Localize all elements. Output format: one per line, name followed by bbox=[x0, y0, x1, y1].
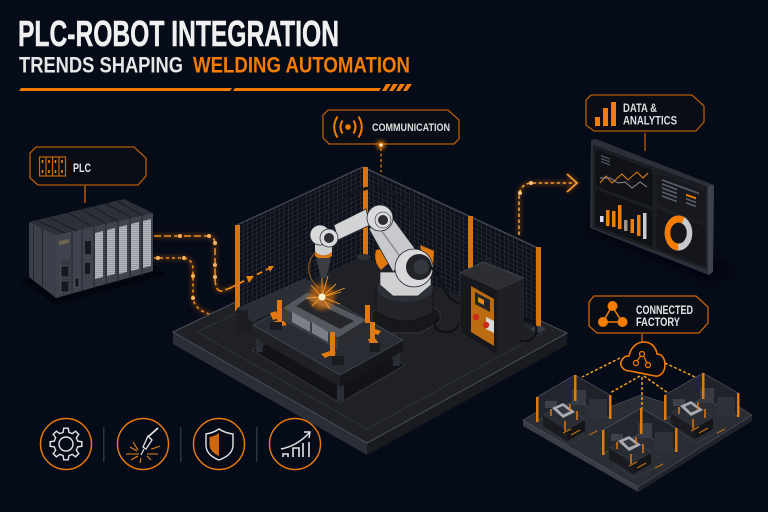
welding spark bbox=[306, 276, 345, 310]
connector: communication down to cell bbox=[377, 141, 385, 172]
Data and Analytics callout bbox=[586, 95, 704, 151]
robot upper arm bbox=[334, 205, 393, 240]
line chart bbox=[600, 172, 648, 188]
icon: growth chart bbox=[270, 418, 320, 470]
robot base bbox=[375, 245, 434, 296]
robot wrist and torch bbox=[309, 225, 338, 287]
icon: network triangle bbox=[598, 301, 628, 327]
connector: PLC to robot cell bbox=[154, 234, 233, 322]
Communication callout bbox=[323, 110, 459, 144]
icon: welding torch bbox=[118, 418, 168, 470]
main title: PLC-ROBOT INTEGRATION bbox=[18, 13, 339, 54]
orange clamps bbox=[270, 300, 381, 365]
control panel bbox=[471, 286, 494, 346]
icon: PLC modules bbox=[40, 157, 66, 176]
bottom icon row bbox=[40, 418, 320, 470]
floor platform bbox=[173, 240, 567, 455]
title block bbox=[18, 13, 412, 91]
icon: cloud network bbox=[621, 342, 665, 376]
Communication text: COMMUNICATION bbox=[372, 122, 450, 134]
welding cable bbox=[323, 188, 413, 235]
donut panel bbox=[656, 208, 706, 267]
workpiece frame bbox=[282, 292, 367, 350]
factory platform bbox=[523, 385, 752, 492]
donut chart bbox=[667, 218, 690, 248]
mini cell: center bbox=[602, 408, 678, 478]
cables to controller bbox=[430, 267, 536, 341]
Data text: DATA & bbox=[623, 103, 657, 115]
robot shoulder joint bbox=[395, 249, 433, 287]
Factory text: FACTORY bbox=[636, 315, 680, 329]
bar chart panel bbox=[595, 188, 653, 248]
cloud network links bbox=[582, 358, 695, 408]
PLC callout bbox=[30, 147, 146, 203]
icon: shield bbox=[194, 418, 244, 470]
welding fixture table bbox=[252, 292, 405, 403]
subtitle orange: WELDING AUTOMATION bbox=[193, 52, 410, 78]
safety fence bbox=[235, 167, 545, 332]
robot lower arm bbox=[369, 212, 416, 272]
PLC label text: PLC bbox=[73, 161, 91, 175]
Analytics text: ANALYTICS bbox=[623, 116, 677, 128]
electrical control cabinet bbox=[460, 257, 524, 356]
title underline bbox=[19, 84, 412, 91]
analytics dashboard panel bbox=[582, 139, 735, 280]
mini cell: right bbox=[664, 373, 740, 443]
bars bbox=[600, 205, 646, 239]
icon: gear bbox=[40, 418, 92, 470]
line chart panel bbox=[595, 148, 653, 208]
Connected Factory callout bbox=[589, 296, 708, 342]
icon: bar chart bbox=[595, 102, 616, 126]
PLC hardware rack bbox=[20, 199, 165, 305]
connector dashes through fence bbox=[230, 266, 274, 288]
robot pedestal bbox=[372, 274, 440, 333]
connector: cell to analytics bbox=[518, 174, 577, 235]
rear rail bbox=[236, 278, 322, 336]
factory floor with cells bbox=[523, 373, 752, 492]
robot work cell bbox=[173, 167, 567, 455]
Connected text: CONNECTED bbox=[636, 303, 693, 317]
icon: radio signal bbox=[334, 116, 362, 138]
text list panel bbox=[656, 172, 706, 224]
subtitle white: TRENDS SHAPING bbox=[19, 52, 183, 78]
mini cell: left bbox=[536, 375, 612, 445]
